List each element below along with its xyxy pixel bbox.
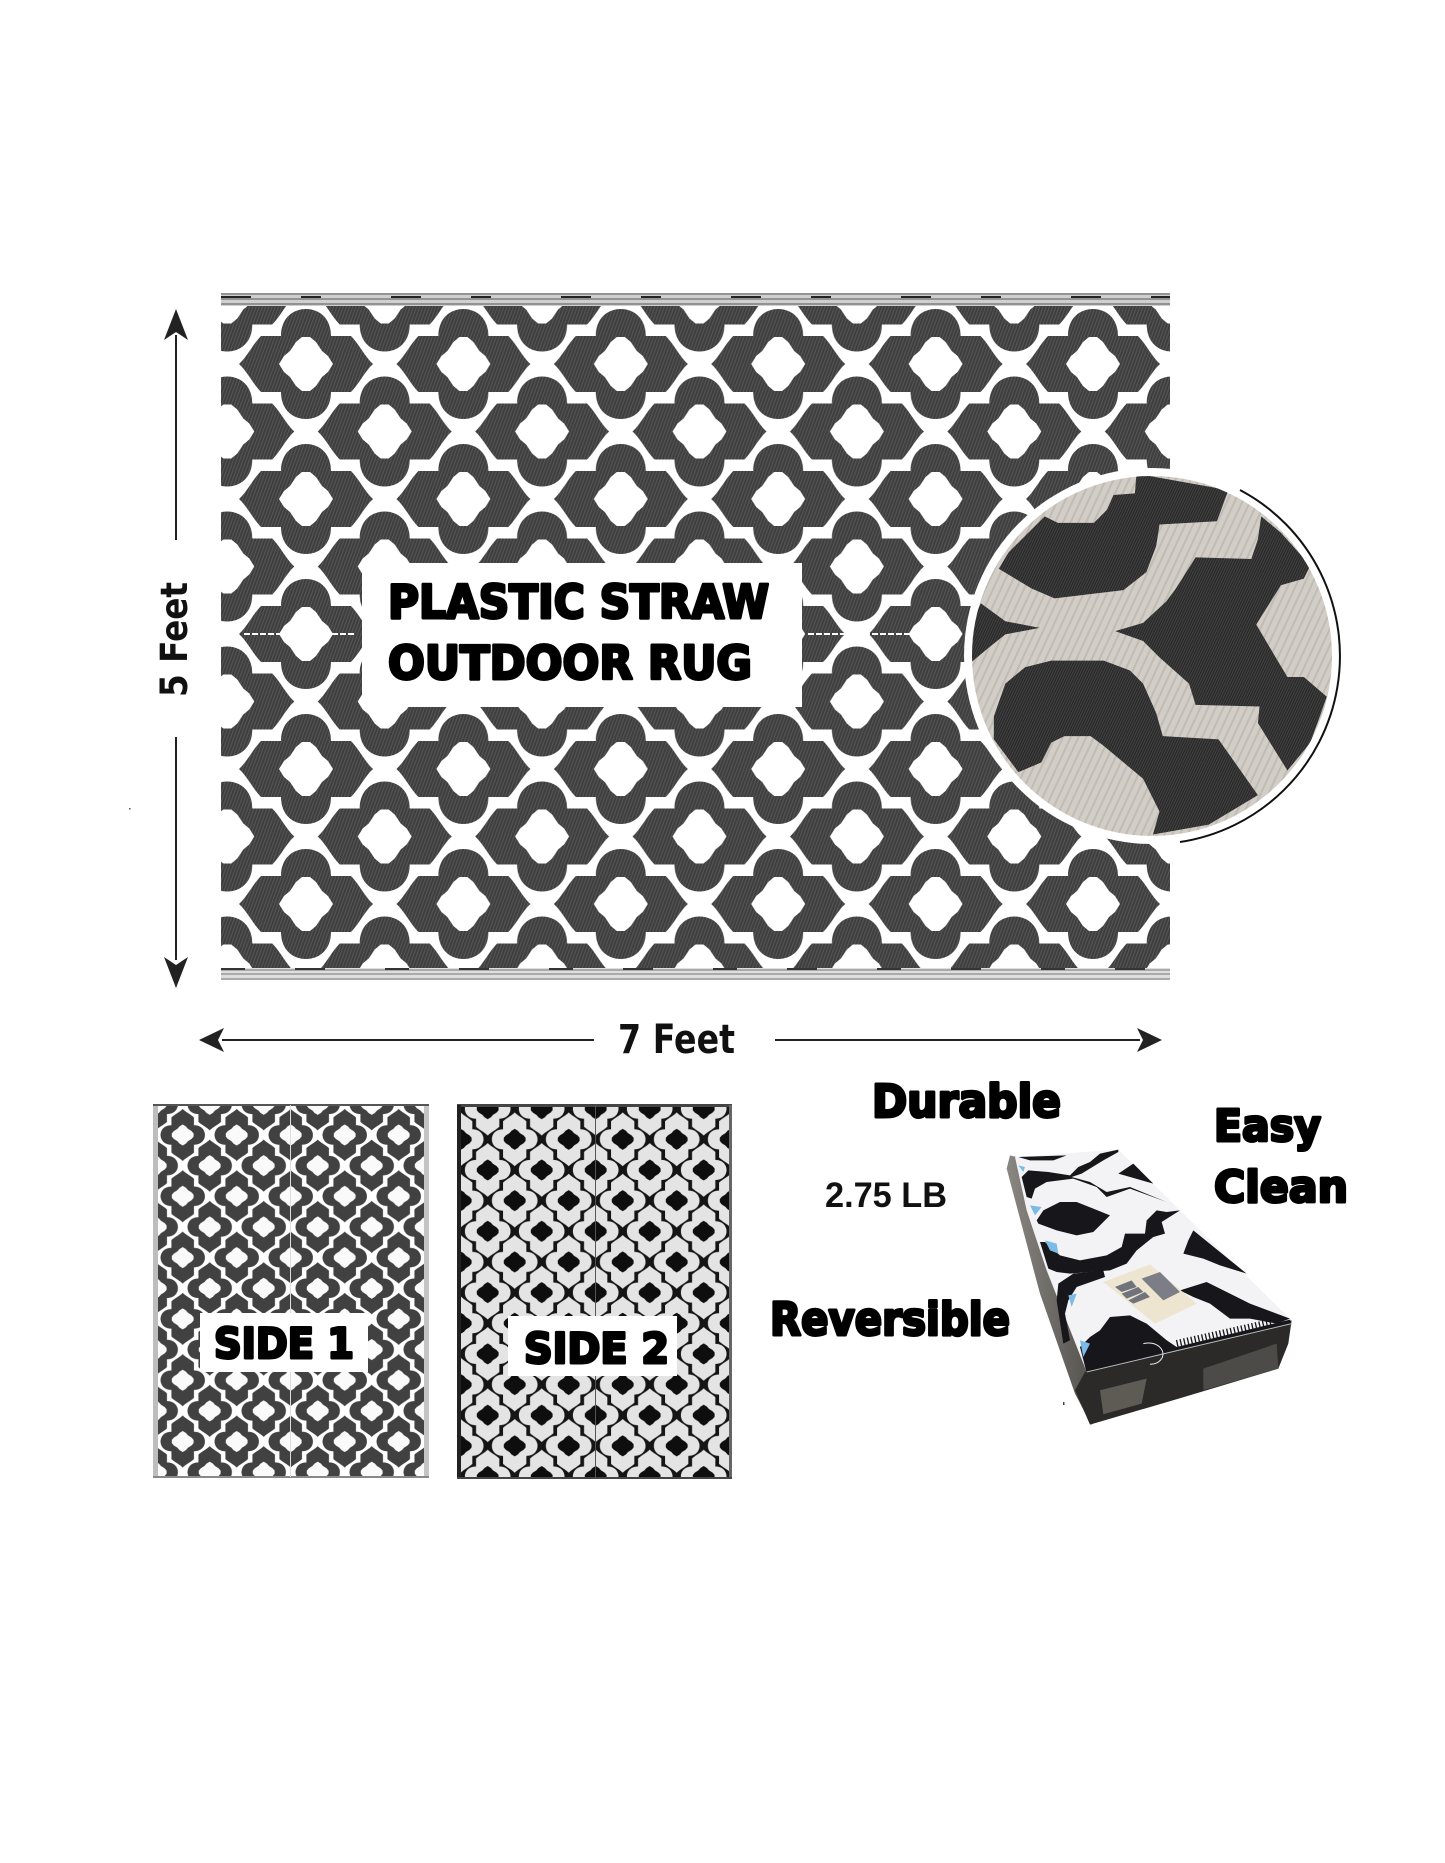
- arrow: width: [199, 1028, 1162, 1052]
- weight label: 2.75 LB: [825, 1176, 947, 1215]
- plastic side: [1007, 1155, 1092, 1425]
- feature: Clean: Clean: [1214, 1162, 1348, 1213]
- callout: weave detail circle: [964, 468, 1340, 845]
- product title label: PLASTIC STRAW: [388, 575, 769, 629]
- shipping label: [1103, 1264, 1197, 1324]
- side 2 label: SIDE 2: [524, 1324, 669, 1373]
- front face: [1075, 1320, 1292, 1425]
- product title label: [362, 563, 802, 707]
- seam line: [1087, 1324, 1292, 1372]
- top face pattern: [1018, 1150, 1292, 1373]
- arrow: height: [164, 309, 188, 988]
- seam: [244, 633, 960, 635]
- top face: [1015, 1150, 1292, 1372]
- bottom fringe: [221, 968, 1170, 980]
- feature: Durable: Durable: [872, 1075, 1061, 1128]
- main rug: [221, 293, 1170, 980]
- label: 5 Feet: 5 Feet: [153, 582, 196, 697]
- plastic tie: [1143, 1343, 1163, 1364]
- sawtooth edge: [1177, 1322, 1273, 1344]
- top fringe: [221, 293, 1170, 306]
- panel: side 2 rug: [457, 1104, 732, 1479]
- product title label: OUTDOOR RUG: [388, 636, 752, 690]
- side 1 label: SIDE 1: [214, 1319, 354, 1368]
- feature: Easy: Easy: [1214, 1101, 1321, 1152]
- label: 7 Feet: 7 Feet: [618, 1017, 735, 1063]
- panel: side 1 rug: [153, 1104, 429, 1478]
- feature: Reversible: Reversible: [770, 1293, 1010, 1346]
- packaged rug photo: [1007, 1150, 1292, 1425]
- tiny stray mark: near package: [1063, 1402, 1064, 1405]
- tiny stray mark: [129, 808, 130, 810]
- blue accents: [1018, 1165, 1090, 1357]
